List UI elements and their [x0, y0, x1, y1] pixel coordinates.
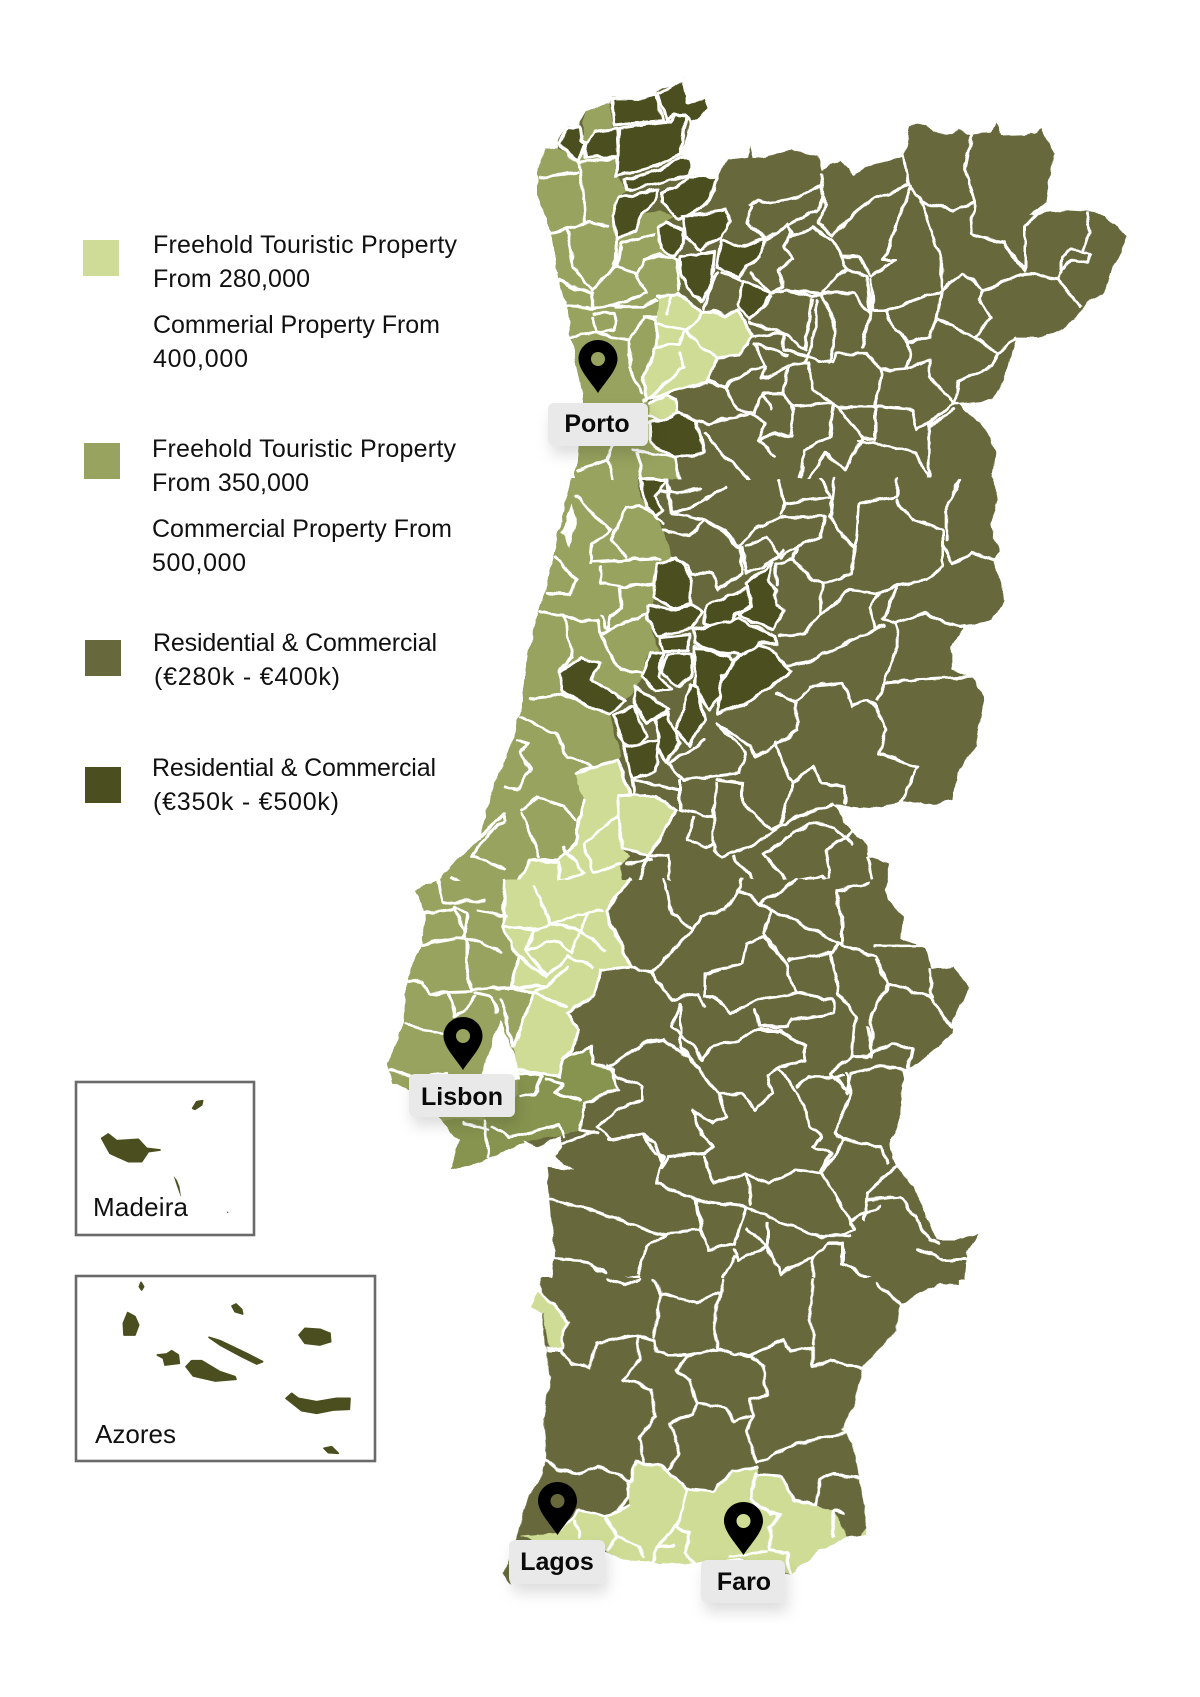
map label: Lagos — [509, 1540, 605, 1584]
legend item: freehold from 280,000: Commerial Property From — [153, 311, 440, 339]
legend item: residential and commercial 280k to 400k — [85, 629, 437, 691]
inset: Azores: Azores — [95, 1419, 176, 1449]
legend item: freehold from 280,000: 400,000 — [153, 345, 248, 373]
map label: Porto: Porto — [564, 410, 630, 438]
legend item: freehold from 350,000: Freehold Touristic Property — [152, 435, 456, 463]
map pin: Porto — [578, 340, 618, 393]
legend — [83, 231, 458, 816]
map section: centre-south — [388, 880, 978, 1280]
map pin: Lisbon — [444, 1017, 482, 1070]
legend item: freehold from 350,000: 500,000 — [152, 549, 246, 577]
legend item: freehold from 280,000: Freehold Touristic Property — [153, 231, 458, 259]
legend item: freehold from 350,000: Commercial Property From — [152, 515, 452, 543]
map label: Porto — [548, 403, 648, 446]
map section: south and Algarve — [502, 1278, 960, 1585]
map section: centre-north — [418, 479, 1003, 900]
map label: Lisbon — [409, 1074, 515, 1117]
legend item: freehold from 350,000: From 350,000 — [152, 469, 309, 497]
map pin: Lagos — [538, 1482, 577, 1535]
legend item: residential and commercial 350k to 500k: (€350k - €500k) — [153, 788, 339, 816]
map section: north — [538, 78, 1127, 480]
map label: Lisbon: Lisbon — [421, 1083, 503, 1111]
map label: Lagos: Lagos — [520, 1548, 594, 1576]
legend item: residential and commercial 280k to 400k: Residential & Commercial — [153, 629, 437, 657]
legend item: freehold from 280,000: From 280,000 — [153, 265, 310, 293]
map label: Faro: Faro — [717, 1568, 771, 1596]
map: Portugal mainland municipalities — [388, 78, 1127, 1585]
inset: Azores — [76, 1276, 375, 1461]
legend item: residential and commercial 350k to 500k — [85, 754, 436, 816]
inset: Madeira: Madeira — [93, 1192, 189, 1222]
inset: Madeira — [76, 1082, 254, 1235]
legend item: freehold from 350,000 — [84, 435, 456, 577]
legend item: residential and commercial 350k to 500k: Residential & Commercial — [152, 754, 436, 782]
Azores islands — [123, 1282, 350, 1453]
map label: Faro — [701, 1560, 785, 1603]
map pin: Faro — [724, 1502, 763, 1555]
legend item: freehold from 280,000 — [83, 231, 458, 373]
legend item: residential and commercial 280k to 400k: (€280k - €400k) — [154, 663, 340, 691]
Madeira islands — [102, 1101, 228, 1213]
